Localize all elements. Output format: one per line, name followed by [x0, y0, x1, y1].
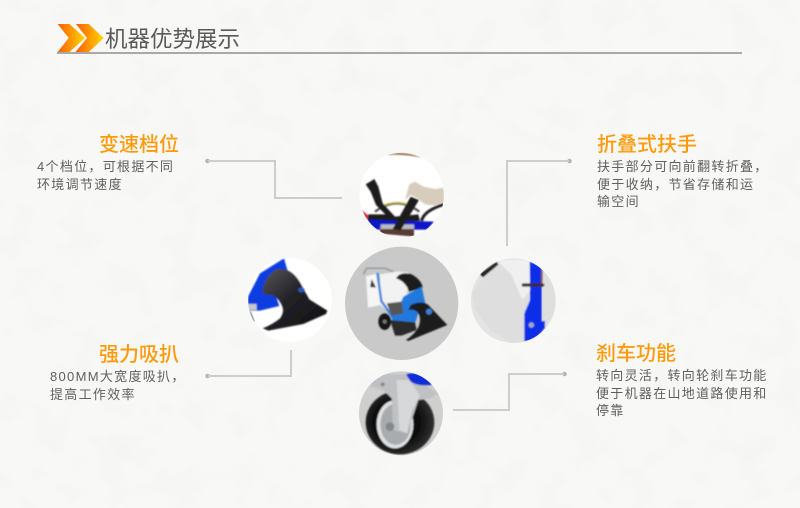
photo: machine overview: [345, 247, 458, 360]
section header: [57, 24, 742, 54]
text: gear selection: 环境调节速度: [37, 176, 123, 192]
text: gear selection: 4个档位，可根据不同: [37, 159, 174, 174]
panel: brake function: [596, 342, 768, 418]
connector: gear: [205, 159, 342, 198]
photo: caster wheel: [359, 371, 443, 455]
text: strong suction: [50, 369, 186, 402]
connector: suction: [205, 350, 291, 378]
panel: gear selection: [37, 134, 179, 192]
heading: brake function: 刹车功能: [596, 343, 676, 365]
text: brake function: 转向灵活，转向轮刹车功能: [596, 368, 768, 383]
text: strong suction: 800MM大宽度吸扒，: [50, 369, 186, 384]
text: folding handle: 输空间: [597, 194, 640, 209]
connector: folding handle: [507, 159, 572, 246]
text: brake function: [596, 368, 768, 418]
panel: folding handle: [597, 134, 769, 209]
heading: gear selection: 变速档位: [99, 134, 179, 156]
text: strong suction: 提高工作效率: [50, 386, 136, 402]
text: folding handle: 便于收纳，节省存储和运: [597, 176, 754, 192]
text: gear selection: [37, 159, 174, 192]
text: folding handle: 扶手部分可向前翻转折叠，: [597, 159, 769, 174]
circular product photos: [248, 152, 556, 456]
text: brake function: 停靠: [596, 403, 625, 418]
panel: strong suction: [50, 344, 186, 402]
heading: strong suction: 强力吸扒: [99, 344, 179, 366]
text: brake function: 便于机器在山地道路使用和: [596, 386, 768, 400]
heading: folding handle: 折叠式扶手: [597, 134, 697, 156]
header rule: [57, 52, 742, 54]
connector: brake: [453, 372, 567, 410]
photo: gear levers: [359, 153, 445, 237]
text: folding handle: [597, 159, 769, 209]
icon: double chevron: [58, 24, 104, 52]
photo: folded handle: [471, 258, 557, 345]
heading: 机器优势展示: [105, 27, 240, 52]
photo: suction nozzle: [248, 258, 332, 342]
